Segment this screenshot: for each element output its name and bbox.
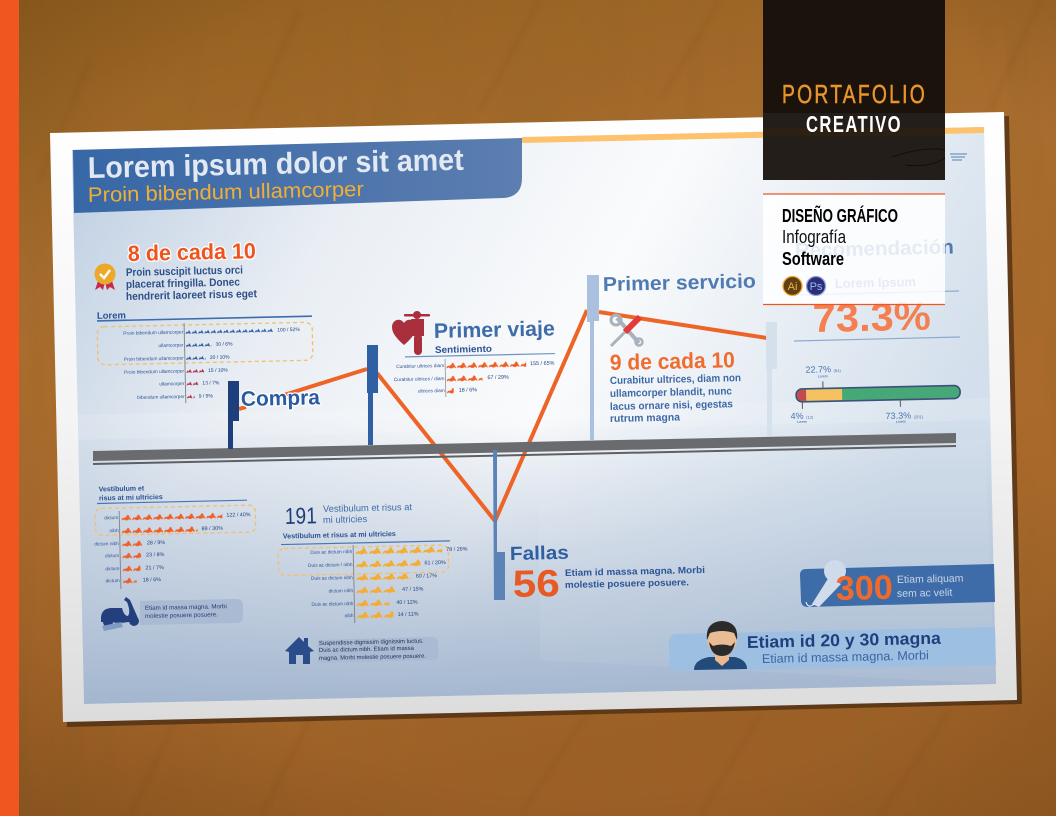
chart: Sentimiento pictogram bars: 18 / 6% [459,387,477,394]
chart: Sentimiento pictogram bars: Curabitur ultrices diam [396,363,444,370]
panel: Recomendación [789,237,961,426]
chart heading: Lorem [97,310,126,322]
note text: Etiam id massa magna. Morbi [145,603,227,612]
description [565,564,705,590]
timeline connector [239,369,367,409]
chart: Vestibulum yellow pictogram bars: 78 / 26% [446,546,468,553]
statistic: 56 [512,563,560,606]
chart: Sentimiento pictogram bars: ultrices diam [418,388,445,395]
chart: Vestibulum orange pictogram bars: dictum [105,553,119,559]
type: Infografía [782,227,847,247]
subtitle: Proin bibendum ullamcorper [88,178,364,207]
icon: Photoshop: Ps [810,281,823,293]
chart: Vestibulum yellow pictogram bars: 60 / 17% [416,573,437,580]
timeline connector [377,310,587,521]
highlight box [95,505,256,536]
title: Lorem ipsum dolor sit amet [87,144,464,185]
chart: Vestibulum yellow pictogram bars [278,527,469,625]
body text: lacus ornare nisi, egestas [610,398,733,413]
chart: Vestibulum yellow pictogram bars: Duis ac dictum nibh [310,549,353,556]
chart: Vestibulum orange pictogram bars: 28 / 9% [147,540,165,546]
logo mark [892,149,945,166]
description: Vestibulum et risus at [323,501,413,514]
marker: Compra: Compra [241,386,320,411]
description [323,501,413,525]
highlight box [97,322,313,365]
subheading: Etiam id massa magna. Morbi [762,648,929,666]
icon: bearded man [694,621,747,670]
chart: Vestibulum yellow pictogram bars: 40 / 12% [396,600,418,606]
body text [610,372,741,425]
heading: Etiam id 20 y 30 magna [747,629,942,652]
portfolio subtitle: CREATIVO [806,111,902,137]
logo stripes [950,154,967,160]
note text: molestie posuere posuere. [145,611,218,620]
chart: Vestibulum yellow pictogram bars: dictum nibh [329,588,353,595]
paper shadow [54,116,1022,727]
panel: 8 de cada 10 [94,238,257,303]
body text: hendrerit laoreet risus eget [126,288,257,303]
chart: Lorem pictogram bars: bibendum ullamcorper [137,394,185,401]
chart: Vestibulum yellow pictogram bars: 61 / 20% [424,560,446,566]
progress bar [789,361,961,426]
chart: Lorem pictogram bars: 100 / 52% [277,327,300,333]
description: Etiam aliquam [897,573,964,586]
description [897,573,964,600]
note text: Suspendisse dignissim dignissim luctus. [319,639,424,647]
progress bar: Lorem [797,420,807,424]
chart heading: Vestibulum et [99,485,145,493]
statistic: 300 [835,569,893,608]
chart: Sentimiento pictogram bars: 155 / 65% [530,361,555,367]
panel: 191 [285,501,413,529]
chart: Sentimiento pictogram bars: 67 / 29% [487,375,509,381]
printed infographic sheet [50,112,1017,722]
chart: Vestibulum orange pictogram bars: 23 / 8% [146,552,165,558]
chart: Lorem pictogram bars: ullamcorper [159,381,185,388]
chart: Vestibulum yellow pictogram bars: nibh [345,613,354,619]
description: sem ac velit [897,587,953,600]
road [93,433,956,465]
note text [145,603,227,620]
chart: Vestibulum orange pictogram bars: 18 / 6% [143,577,161,583]
chart: Lorem pictogram bars: 30 / 6% [215,341,233,348]
project info card [763,194,945,304]
progress bar: 73.3% (201) [886,410,924,421]
marker: Fallas [493,450,505,600]
chart: Sentimiento pictogram bars: Curabitur ultrices / diam [394,376,445,383]
description: molestie posuere posuere. [565,576,689,590]
marker: Primer servicio [587,275,599,440]
icon: scooter [101,597,139,631]
body text: rutrum magna [610,411,680,425]
description: Etiam id massa magna. Morbi [565,564,705,578]
software label: Software [782,249,844,269]
note text [319,639,426,662]
icon: microphone [806,560,846,607]
icon: Illustrator: Ai [788,281,797,293]
callout: house note [285,637,438,664]
chart: Lorem pictogram bars: Proin bibendum ullamcorper [124,369,185,376]
chart: Lorem pictogram bars: Proin bibendum ullamcorper [124,356,184,363]
chart: Lorem pictogram bars: 13 / 7% [202,380,220,387]
chart: Vestibulum orange pictogram bars: 89 / 30% [202,526,223,532]
panel: 300 [800,560,995,608]
accent line top [522,127,984,143]
timeline connector [599,312,767,338]
chart: Vestibulum orange pictogram bars [93,483,257,590]
chart: Lorem pictogram bars: 20 / 10% [210,354,230,361]
callout: scooter note [101,597,243,631]
note text: Duis ac dictum nibh. Etiam id massa [319,646,415,654]
panel: Primer servicio [603,271,756,425]
icon: award badge [94,264,116,290]
chart: Sentimiento pictogram bars [393,354,556,398]
subheading: Sentimiento [435,344,492,356]
subheading: Lorem Ipsum [835,274,916,291]
chart: Vestibulum orange pictogram bars: 122 / 40% [226,512,251,519]
body text: placerat fringilla. Donec [126,276,240,291]
progress bar: 22.7% (64) [805,364,841,375]
chart: Lorem pictogram bars [97,306,314,405]
icon: Photoshop [806,276,826,296]
marker: Primer viaje [367,345,378,445]
note text: magna. Morbi molestie posuere posuere. [319,654,426,662]
body text [126,264,257,303]
progress bar: 4% (12) [790,411,814,421]
progress bar: Lorem [818,374,828,379]
panel: Fallas [510,543,705,606]
chart heading: Vestibulum et risus at mi ultricies [283,529,396,541]
chart: Vestibulum yellow pictogram bars: 47 / 15% [402,586,424,593]
chart: Vestibulum orange pictogram bars: dictum nibh [94,541,119,548]
icon: tools [611,315,642,346]
chart: Vestibulum orange pictogram bars: dictum [104,515,118,521]
chart: Vestibulum orange pictogram bars: dictum [106,578,120,584]
description: mi ultricies [323,513,368,525]
chart: Vestibulum yellow pictogram bars: Duis ac dictum / nibh [308,562,353,569]
heading: 8 de cada 10 [128,238,256,266]
title banner [73,138,522,213]
chart: Lorem pictogram bars: Proin bibendum ullamcorper [123,330,184,337]
orange side strip [0,0,19,816]
chart: Vestibulum orange pictogram bars: nibh [109,528,119,534]
chart heading: risus at mi ultricies [99,494,163,502]
chart: Vestibulum yellow pictogram bars: Duis ac dictum nibh [311,601,354,608]
statistic: 73.3% [812,294,931,341]
heading: Primer servicio [603,271,756,296]
chart: Lorem pictogram bars: ullamcorper [158,343,184,349]
heading: Primer viaje [434,317,555,343]
chart: Vestibulum orange pictogram bars: 21 / 7% [145,565,164,571]
progress bar: Lorem [896,420,906,424]
panel: Primer viaje [392,311,555,356]
portfolio title: PORTAFOLIO [782,79,927,109]
statistic: 9 de cada 10 [610,347,735,375]
statistic: 191 [285,502,317,529]
icon: heart scooter [392,311,430,355]
heading: Recomendación [795,237,954,262]
body text: Curabitur ultrices, diam non [610,372,741,387]
icon: Illustrator [783,276,802,296]
panel: Etiam id 20 y 30 magna [669,621,996,671]
chart: Lorem pictogram bars: 15 / 10% [208,368,228,374]
category: DISEÑO GRÁFICO [782,205,898,226]
chart: Vestibulum yellow pictogram bars: 14 / 11% [398,612,419,618]
highlight box [278,545,449,576]
body text: ullamcorper blandit, nunc [610,385,732,400]
marker: Recomendación [766,322,777,436]
chart: Vestibulum orange pictogram bars: dictum [105,566,120,572]
chart: Lorem pictogram bars: 9 / 5% [199,393,213,400]
chart: Vestibulum yellow pictogram bars: Duis ac dictum nibh [311,575,353,582]
chart heading [99,485,163,502]
marker: Compra [228,381,320,449]
body text: Proin suscipit luctus orci [126,264,243,279]
heading: Fallas [510,543,569,565]
portfolio dark tab [763,0,945,180]
icon: house [285,637,314,664]
